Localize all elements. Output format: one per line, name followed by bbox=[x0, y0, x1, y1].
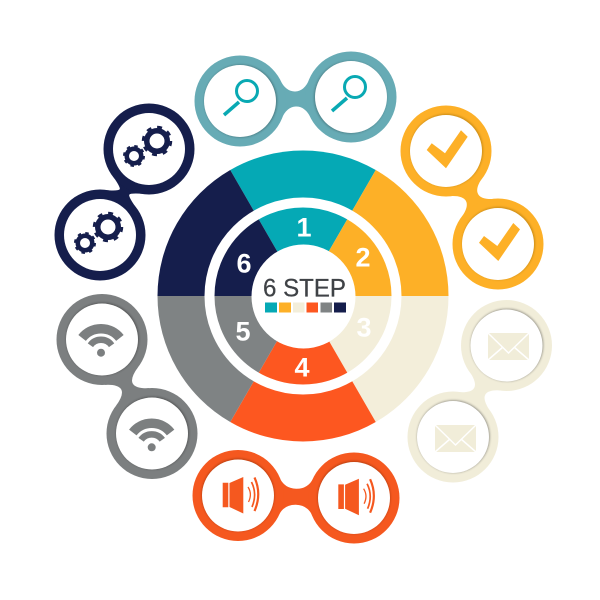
segment 4 bbox=[230, 296, 376, 441]
segment 5 bbox=[158, 296, 303, 422]
panel: navy gears pair bbox=[54, 104, 194, 280]
colour swatches bbox=[265, 302, 346, 312]
segment 3 bbox=[303, 296, 448, 422]
panel: orange speaker pair bbox=[192, 450, 400, 544]
central pie chart bbox=[158, 151, 448, 441]
center disc bbox=[252, 244, 356, 348]
number 3: 3 bbox=[356, 312, 372, 342]
title: 6 STEP: 6 STEP bbox=[263, 274, 346, 302]
icon: wifi bottom bbox=[133, 423, 171, 451]
icon: speaker left bbox=[223, 477, 258, 514]
icon: envelope bottom bbox=[435, 425, 476, 452]
segment 1 bbox=[230, 151, 376, 296]
panel: teal search pair bbox=[194, 52, 396, 146]
icon: gears bottom bbox=[75, 213, 122, 253]
icon: wifi top bbox=[82, 329, 120, 357]
icon: speaker right bbox=[338, 479, 374, 515]
white ring bbox=[210, 202, 396, 390]
panel: gray wifi pair bbox=[56, 294, 198, 479]
icon: magnifier left bbox=[224, 80, 258, 115]
number 1: 1 bbox=[296, 212, 312, 242]
number 5: 5 bbox=[235, 316, 251, 346]
number 4: 4 bbox=[294, 352, 310, 382]
icon: check bottom bbox=[479, 223, 520, 261]
icon: magnifier right bbox=[332, 76, 366, 111]
number 6: 6 bbox=[236, 248, 252, 278]
segment 6 bbox=[158, 170, 303, 296]
panel: cream envelope pair bbox=[408, 300, 552, 482]
segment numbers bbox=[235, 212, 372, 382]
segment 2 bbox=[303, 170, 448, 296]
number 2: 2 bbox=[355, 242, 371, 272]
icon: check top bbox=[427, 130, 468, 168]
icon: envelope top bbox=[488, 333, 529, 360]
panel: yellow check pair bbox=[400, 106, 544, 290]
icon: gears top bbox=[124, 127, 171, 166]
